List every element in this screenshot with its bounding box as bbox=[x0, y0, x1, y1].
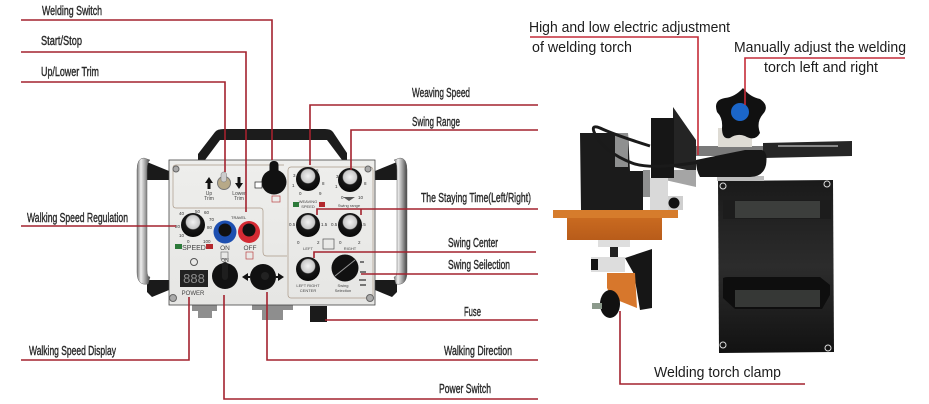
carrying handle bbox=[198, 129, 347, 160]
walking direction knob bbox=[242, 264, 284, 290]
swing center knob bbox=[296, 257, 320, 293]
torch assembly photo bbox=[553, 88, 852, 353]
power switch knob bbox=[212, 258, 238, 289]
label: Fuse: Fuse bbox=[464, 304, 481, 319]
left side handle bbox=[137, 158, 169, 297]
motor block bbox=[580, 133, 643, 210]
label: Walking Speed Display: Walking Speed Display bbox=[29, 343, 116, 358]
swing range knob: 10 bbox=[358, 195, 364, 200]
OFF button: TRAVEL bbox=[231, 215, 247, 220]
swing range knob: 1 bbox=[335, 184, 338, 189]
toggle switch: Up bbox=[206, 191, 212, 197]
label: Power Switch: Power Switch bbox=[439, 381, 491, 396]
weaving speed knob: 6 bbox=[316, 168, 319, 173]
swing range knob: 8 bbox=[364, 181, 367, 186]
label: Up/Lower Trim: Up/Lower Trim bbox=[41, 64, 99, 79]
toggle switch: Trim bbox=[234, 196, 244, 202]
walking speed knob: 70 bbox=[209, 217, 215, 222]
left staying time knob: 0 bbox=[297, 240, 300, 245]
ON button: ON bbox=[220, 245, 230, 252]
cable bbox=[593, 127, 700, 166]
right staying time knob: 0 bbox=[339, 240, 342, 245]
orange carriage bbox=[553, 210, 678, 240]
welding switch knob bbox=[255, 161, 286, 202]
right staying time knob: RIGHT bbox=[344, 246, 357, 251]
bracket bbox=[673, 107, 696, 172]
column and clamp screw bbox=[650, 178, 668, 210]
power switch knob: ON bbox=[221, 258, 229, 264]
leader lines: torch assembly bbox=[530, 37, 905, 384]
walking speed knob: 50 bbox=[195, 209, 201, 214]
swing range knob bbox=[335, 168, 367, 208]
right staying time knob: 2 bbox=[358, 240, 361, 245]
label: Manually adjust the welding: Manually adjust the welding bbox=[734, 40, 906, 56]
left staying time knob bbox=[289, 213, 328, 251]
OFF button: OFF bbox=[244, 245, 257, 252]
swing range knob: 0 bbox=[341, 195, 344, 200]
speed display: POWER bbox=[182, 291, 205, 297]
left staying time knob: 0.5 bbox=[289, 222, 296, 227]
screws bbox=[173, 166, 179, 172]
leader lines: control box bbox=[21, 20, 538, 399]
label: Swing Range: Swing Range bbox=[412, 114, 460, 129]
weaving speed knob: 1 bbox=[292, 183, 295, 188]
walking speed knob: 40 bbox=[179, 211, 185, 216]
walking speed knob: 60 bbox=[204, 210, 210, 215]
front plate bbox=[169, 160, 375, 305]
black mounting plate bbox=[718, 180, 834, 353]
swing selection knob: Selection bbox=[335, 288, 351, 293]
walking speed knob: 100 bbox=[203, 239, 211, 244]
label: torch left and right: torch left and right bbox=[764, 60, 878, 76]
swing range knob: 3 bbox=[336, 174, 339, 179]
weaving speed knob: 0 bbox=[299, 191, 302, 196]
right side handle bbox=[375, 158, 407, 297]
left staying time knob: 1.5 bbox=[321, 222, 328, 227]
rail and torch bbox=[688, 141, 852, 181]
label: Walking Direction: Walking Direction bbox=[444, 343, 512, 358]
label: Start/Stop: Start/Stop bbox=[41, 33, 82, 48]
right staying time knob: .5 bbox=[362, 222, 366, 227]
left staying time knob: LEFT bbox=[303, 246, 313, 251]
walking speed knob: 80 bbox=[207, 225, 213, 230]
walking speed knob: 0 bbox=[187, 239, 190, 244]
speed display bbox=[180, 258, 208, 297]
toggle switch: Lower bbox=[232, 191, 246, 197]
control box photo bbox=[137, 129, 407, 322]
star knob bbox=[716, 88, 766, 147]
walking speed knob: 20 bbox=[175, 224, 181, 229]
walking speed knob: SPEED bbox=[182, 245, 206, 252]
label: High and low electric adjustment: High and low electric adjustment bbox=[529, 20, 730, 36]
swing range knob: Swing range bbox=[338, 203, 361, 208]
swing selection knob bbox=[332, 254, 366, 293]
right staying time knob bbox=[323, 213, 366, 251]
weaving speed knob bbox=[292, 167, 325, 209]
label: Weaving Speed: Weaving Speed bbox=[412, 85, 470, 100]
swing selection knob: Swing bbox=[338, 283, 348, 288]
toggle switch bbox=[204, 172, 246, 202]
left staying time knob: 2 bbox=[317, 240, 320, 245]
torch clamp bbox=[591, 240, 652, 318]
toggle switch: Trim bbox=[204, 196, 214, 202]
label: of welding torch: of welding torch bbox=[532, 40, 632, 56]
connectors under the box bbox=[192, 305, 293, 320]
weaving speed knob: 9 bbox=[319, 191, 322, 196]
swing center knob: LEFT RIGHT bbox=[296, 283, 320, 288]
right staying time knob: 0.5 bbox=[331, 222, 338, 227]
label: Swing Center: Swing Center bbox=[448, 235, 498, 250]
label: Swing Seilection: Swing Seilection bbox=[448, 257, 510, 272]
label: Welding torch clamp: Welding torch clamp bbox=[654, 365, 781, 381]
label: Welding Switch: Welding Switch bbox=[42, 3, 102, 18]
weaving speed knob: 8 bbox=[322, 181, 325, 186]
weaving speed knob: 3 bbox=[293, 173, 296, 178]
walking speed knob bbox=[175, 209, 215, 252]
label: The Staying Time(Left/Right): The Staying Time(Left/Right) bbox=[421, 190, 531, 205]
speed display: 888 bbox=[183, 271, 205, 286]
weaving speed knob: SPEED bbox=[301, 204, 315, 209]
panel outlines bbox=[173, 165, 287, 256]
label: Walking Speed Regulation: Walking Speed Regulation bbox=[27, 210, 128, 225]
walking speed knob: 10 bbox=[179, 233, 185, 238]
weaving speed knob: WEAVING bbox=[299, 199, 317, 204]
ON button bbox=[214, 220, 236, 259]
swing center knob: CENTER bbox=[300, 288, 316, 293]
OFF button bbox=[231, 215, 260, 259]
